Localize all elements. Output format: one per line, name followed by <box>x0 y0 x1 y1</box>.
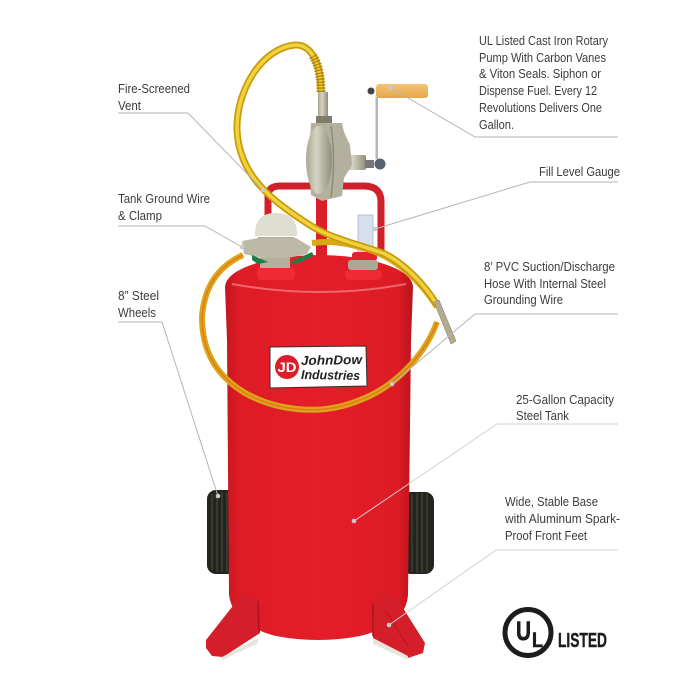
icon: UL circle: U <box>516 616 531 646</box>
label: rotary pump: UL Listed Cast Iron Rotary <box>479 33 608 48</box>
right front foot <box>372 593 425 660</box>
icon: UL circle: L <box>532 629 543 652</box>
spring guard on hose <box>313 56 321 92</box>
tank top highlight <box>232 284 406 292</box>
label: rotary pump: Revolutions Delivers One <box>479 100 602 115</box>
label: steel wheels <box>118 288 159 320</box>
label: stable base: Wide, Stable Base <box>505 494 598 509</box>
label: tank ground wire: & Clamp <box>118 208 162 223</box>
label: fire-screened vent: Vent <box>118 98 141 113</box>
label: tank ground wire: Tank Ground Wire <box>118 191 210 206</box>
pump stand post <box>316 198 327 260</box>
icon: UL circle <box>505 610 551 656</box>
listed text: LISTED <box>558 630 607 652</box>
label: rotary pump <box>479 33 608 132</box>
hose nozzle <box>434 300 456 344</box>
crank arm <box>376 97 378 159</box>
brand name: JohnDow <box>301 352 363 368</box>
label: PVC hose: Hose With Internal Steel <box>484 276 606 291</box>
icon: JD circle: JD <box>278 359 296 375</box>
fill level gauge <box>345 215 382 280</box>
label: tank capacity: 25-Gallon Capacity <box>516 392 614 407</box>
UL listed mark <box>505 610 607 656</box>
label: rotary pump: & Viton Seals. Siphon or <box>479 66 602 81</box>
crank handle <box>368 84 428 98</box>
logo label: Industries <box>301 367 360 383</box>
left front foot <box>206 593 260 660</box>
label: rotary pump: Pump With Carbon Vanes <box>479 50 606 65</box>
label: tank ground wire <box>118 191 210 223</box>
suction hose lower loop <box>202 255 437 410</box>
rotary pump <box>306 92 386 201</box>
hose across tank <box>312 242 437 307</box>
label: rotary pump: Gallon. <box>479 117 514 132</box>
icon: right wheel <box>402 492 434 574</box>
label: stable base: Proof Front Feet <box>505 528 587 543</box>
label: fire-screened vent <box>118 81 190 113</box>
red handle frame <box>268 186 381 252</box>
label: tank capacity <box>516 392 614 423</box>
label: PVC hose: Grounding Wire <box>484 292 563 307</box>
label: fire-screened vent: Fire-Screened <box>118 81 190 96</box>
fire-screened vent and clamp <box>242 213 314 280</box>
tank body <box>225 255 413 640</box>
label: tank capacity: Steel Tank <box>516 408 569 423</box>
icon: left wheel <box>207 490 237 574</box>
leader line dots <box>216 86 394 627</box>
pump hose upper loop <box>237 45 437 305</box>
fuel caddy illustration <box>202 45 456 660</box>
leader lines <box>118 88 618 625</box>
label: rotary pump: Dispense Fuel. Every 12 <box>479 83 597 98</box>
logo label <box>270 346 367 388</box>
label: stable base: with Aluminum Spark- <box>504 511 620 526</box>
label: steel wheels: 8” Steel <box>118 288 159 303</box>
label: steel wheels: Wheels <box>118 305 156 320</box>
label: PVC hose <box>484 259 615 307</box>
label: fill level gauge: Fill Level Gauge <box>539 164 620 179</box>
label: stable base <box>504 494 620 543</box>
label: PVC hose: 8’ PVC Suction/Discharge <box>484 259 615 274</box>
